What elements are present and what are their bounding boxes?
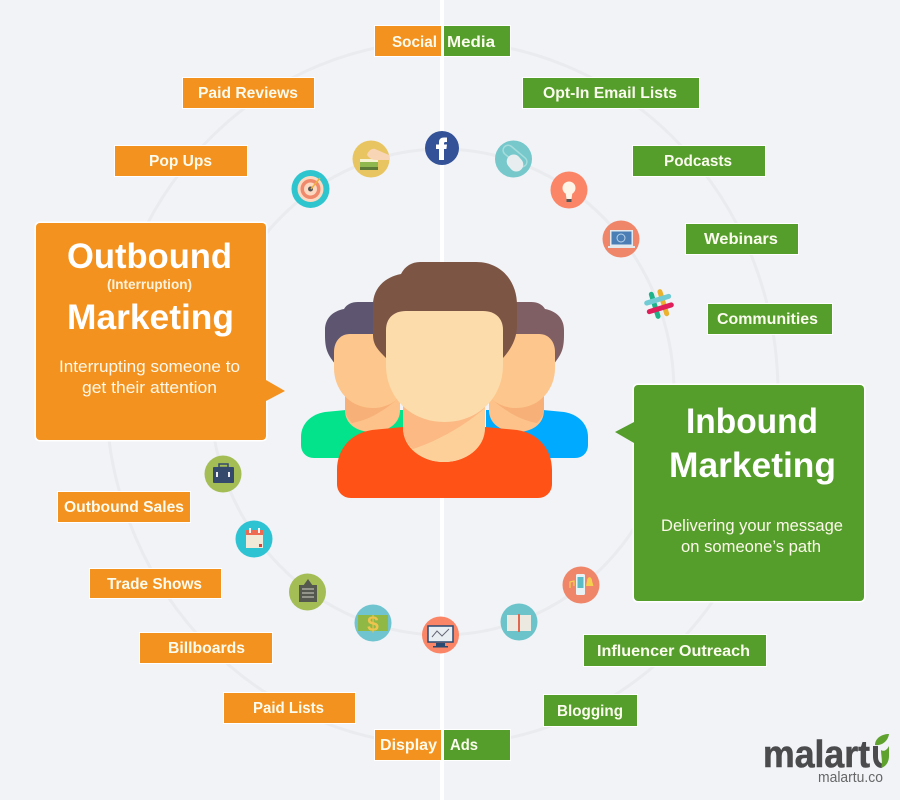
label: Media	[443, 25, 511, 57]
icon: calendar	[236, 520, 272, 558]
icon: money: $	[367, 613, 379, 636]
icon: payment	[352, 140, 390, 178]
label: Paid Reviews	[182, 77, 315, 109]
icon: facebook	[425, 131, 459, 165]
person: back right	[479, 302, 588, 458]
icon: light bulb	[550, 172, 588, 208]
label: Blogging: Blogging	[557, 703, 623, 720]
icon: briefcase	[204, 456, 242, 492]
label: Blogging	[543, 694, 638, 727]
label: Trade Shows	[89, 568, 222, 599]
logo: malartu: malart	[763, 734, 870, 776]
label: Outbound Sales	[57, 491, 191, 523]
illustration: group of people	[301, 262, 588, 498]
label: Podcasts	[632, 145, 766, 177]
label: Billboards: Billboards	[168, 640, 245, 657]
panel: outbound marketing	[34, 222, 285, 442]
label: Social: Social	[392, 34, 437, 51]
label: Webinars	[685, 223, 799, 255]
label: Ads: Ads	[450, 737, 478, 754]
label: Social	[374, 25, 442, 57]
label: Display	[374, 729, 442, 761]
text: inbound description	[661, 516, 843, 556]
icon: slack	[642, 287, 676, 321]
panel: inbound marketing	[615, 384, 866, 602]
icon: phone notification	[562, 566, 600, 604]
label: Influencer Outreach: Influencer Outreach	[597, 643, 750, 660]
icon: computer mouse	[495, 140, 532, 178]
heading: inbound: Inbound	[686, 402, 818, 441]
icon: clipboard	[289, 574, 326, 610]
label: Opt-In Email Lists	[522, 77, 700, 109]
label: Paid Lists	[223, 692, 356, 724]
label: Outbound Sales: Outbound Sales	[64, 499, 184, 516]
label: Pop Ups: Pop Ups	[149, 153, 212, 170]
text: inbound description: Delivering your message	[661, 516, 843, 535]
label: Opt-In Email Lists: Opt-In Email Lists	[543, 85, 677, 102]
icon: money	[354, 604, 392, 642]
icon: open book	[500, 604, 538, 640]
label: Influencer Outreach	[583, 634, 767, 667]
label: Paid Reviews: Paid Reviews	[198, 85, 298, 102]
label: Podcasts: Podcasts	[664, 153, 732, 170]
text: inbound description: on someone’s path	[681, 537, 821, 556]
label: Trade Shows: Trade Shows	[107, 576, 202, 593]
icon: laptop video	[602, 220, 640, 258]
label: Display: Display	[380, 737, 437, 754]
icon: target	[292, 170, 330, 208]
label: Paid Lists: Paid Lists	[253, 700, 324, 717]
label: Billboards	[139, 632, 273, 664]
logo: malartu: malartu.co	[818, 770, 883, 786]
label: Ads	[443, 729, 511, 761]
icon: chart monitor	[422, 616, 459, 654]
label: Communities	[707, 303, 833, 335]
heading: outbound: Outbound	[67, 237, 232, 276]
person: front	[337, 262, 552, 498]
text: outbound description	[59, 357, 240, 397]
label: Media: Media	[447, 34, 495, 51]
heading: marketing: Marketing	[67, 298, 234, 337]
heading: marketing: Marketing	[669, 446, 836, 485]
label: Pop Ups	[114, 145, 248, 177]
label: Webinars: Webinars	[704, 231, 778, 248]
text: outbound description: Interrupting someone to	[59, 357, 240, 376]
subheading: interruption: (Interruption)	[107, 276, 192, 292]
label: Communities: Communities	[717, 311, 818, 328]
person: back left	[301, 302, 410, 458]
text: outbound description: get their attention	[82, 378, 217, 397]
